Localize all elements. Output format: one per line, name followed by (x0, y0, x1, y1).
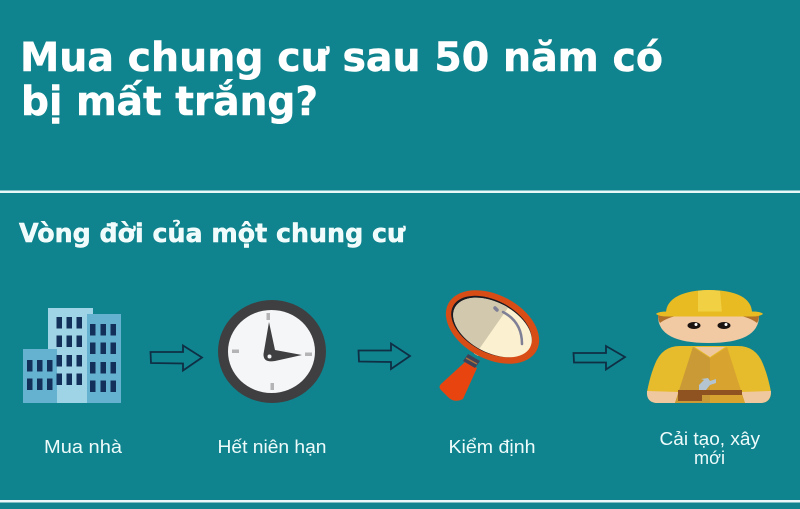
title: bị mất trắng? (21, 78, 318, 125)
label: Cải tạo, xây mới (660, 429, 760, 468)
arrow 2 (358, 344, 410, 369)
icon: construction worker (647, 290, 771, 403)
icon: clock (218, 300, 326, 403)
section heading: Vòng đời của một chung cư (19, 218, 406, 249)
label: Mua nhà: Mua nhà (44, 437, 123, 457)
face (658, 316, 759, 343)
body (647, 346, 771, 403)
label: Hết niên hạn: Hết niên hạn (218, 437, 326, 457)
icon: buildings (23, 308, 121, 403)
icon: magnifying glass (440, 290, 540, 401)
arrow 1 (150, 346, 202, 370)
title (20, 35, 663, 125)
label: Cải tạo, xây mới: Cải tạo, xây (660, 429, 760, 449)
arrow 3 (574, 346, 625, 370)
label: Kiểm định: Kiểm định (448, 437, 536, 457)
hard hat (666, 290, 752, 313)
label: Cải tạo, xây mới: mới (694, 448, 725, 468)
title: Mua chung cư sau 50 năm có (20, 35, 663, 81)
